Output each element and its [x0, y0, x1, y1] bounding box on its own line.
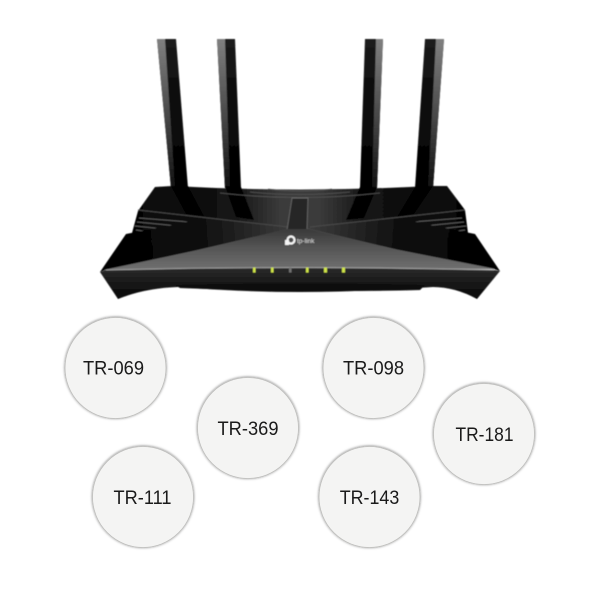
- antenna 1: [157, 39, 188, 188]
- centre fin: [287, 198, 308, 230]
- badge TR-098: [323, 318, 424, 418]
- rear vents: [135, 189, 466, 232]
- badge TR-181: TR-181: [456, 424, 514, 446]
- antenna 2: [217, 39, 241, 188]
- badge TR-143: TR-143: [340, 487, 399, 509]
- antenna 3: [360, 39, 383, 188]
- badge TR-111: TR-111: [114, 487, 172, 509]
- badge TR-069: [65, 318, 166, 418]
- antenna 4: [415, 39, 444, 188]
- front grey face: [105, 229, 494, 270]
- router: [100, 39, 500, 299]
- right top panel: [308, 210, 500, 271]
- left top panel: [100, 210, 290, 272]
- router top shell: [132, 186, 468, 233]
- logo: tp-link: [297, 238, 315, 245]
- badge TR-369: [198, 378, 298, 478]
- badge TR-369: TR-369: [218, 418, 278, 440]
- logo: [285, 236, 315, 245]
- badge TR-143: [319, 446, 420, 548]
- underside vents: [175, 284, 425, 291]
- front lower strip: [100, 268, 500, 299]
- panel highlights: [138, 210, 465, 227]
- badge TR-111: [92, 446, 194, 548]
- status leds: [253, 268, 345, 272]
- badge TR-098: TR-098: [343, 358, 404, 380]
- antenna base fins: [171, 186, 433, 220]
- badge TR-069: TR-069: [83, 358, 144, 380]
- badge TR-181: [434, 384, 534, 484]
